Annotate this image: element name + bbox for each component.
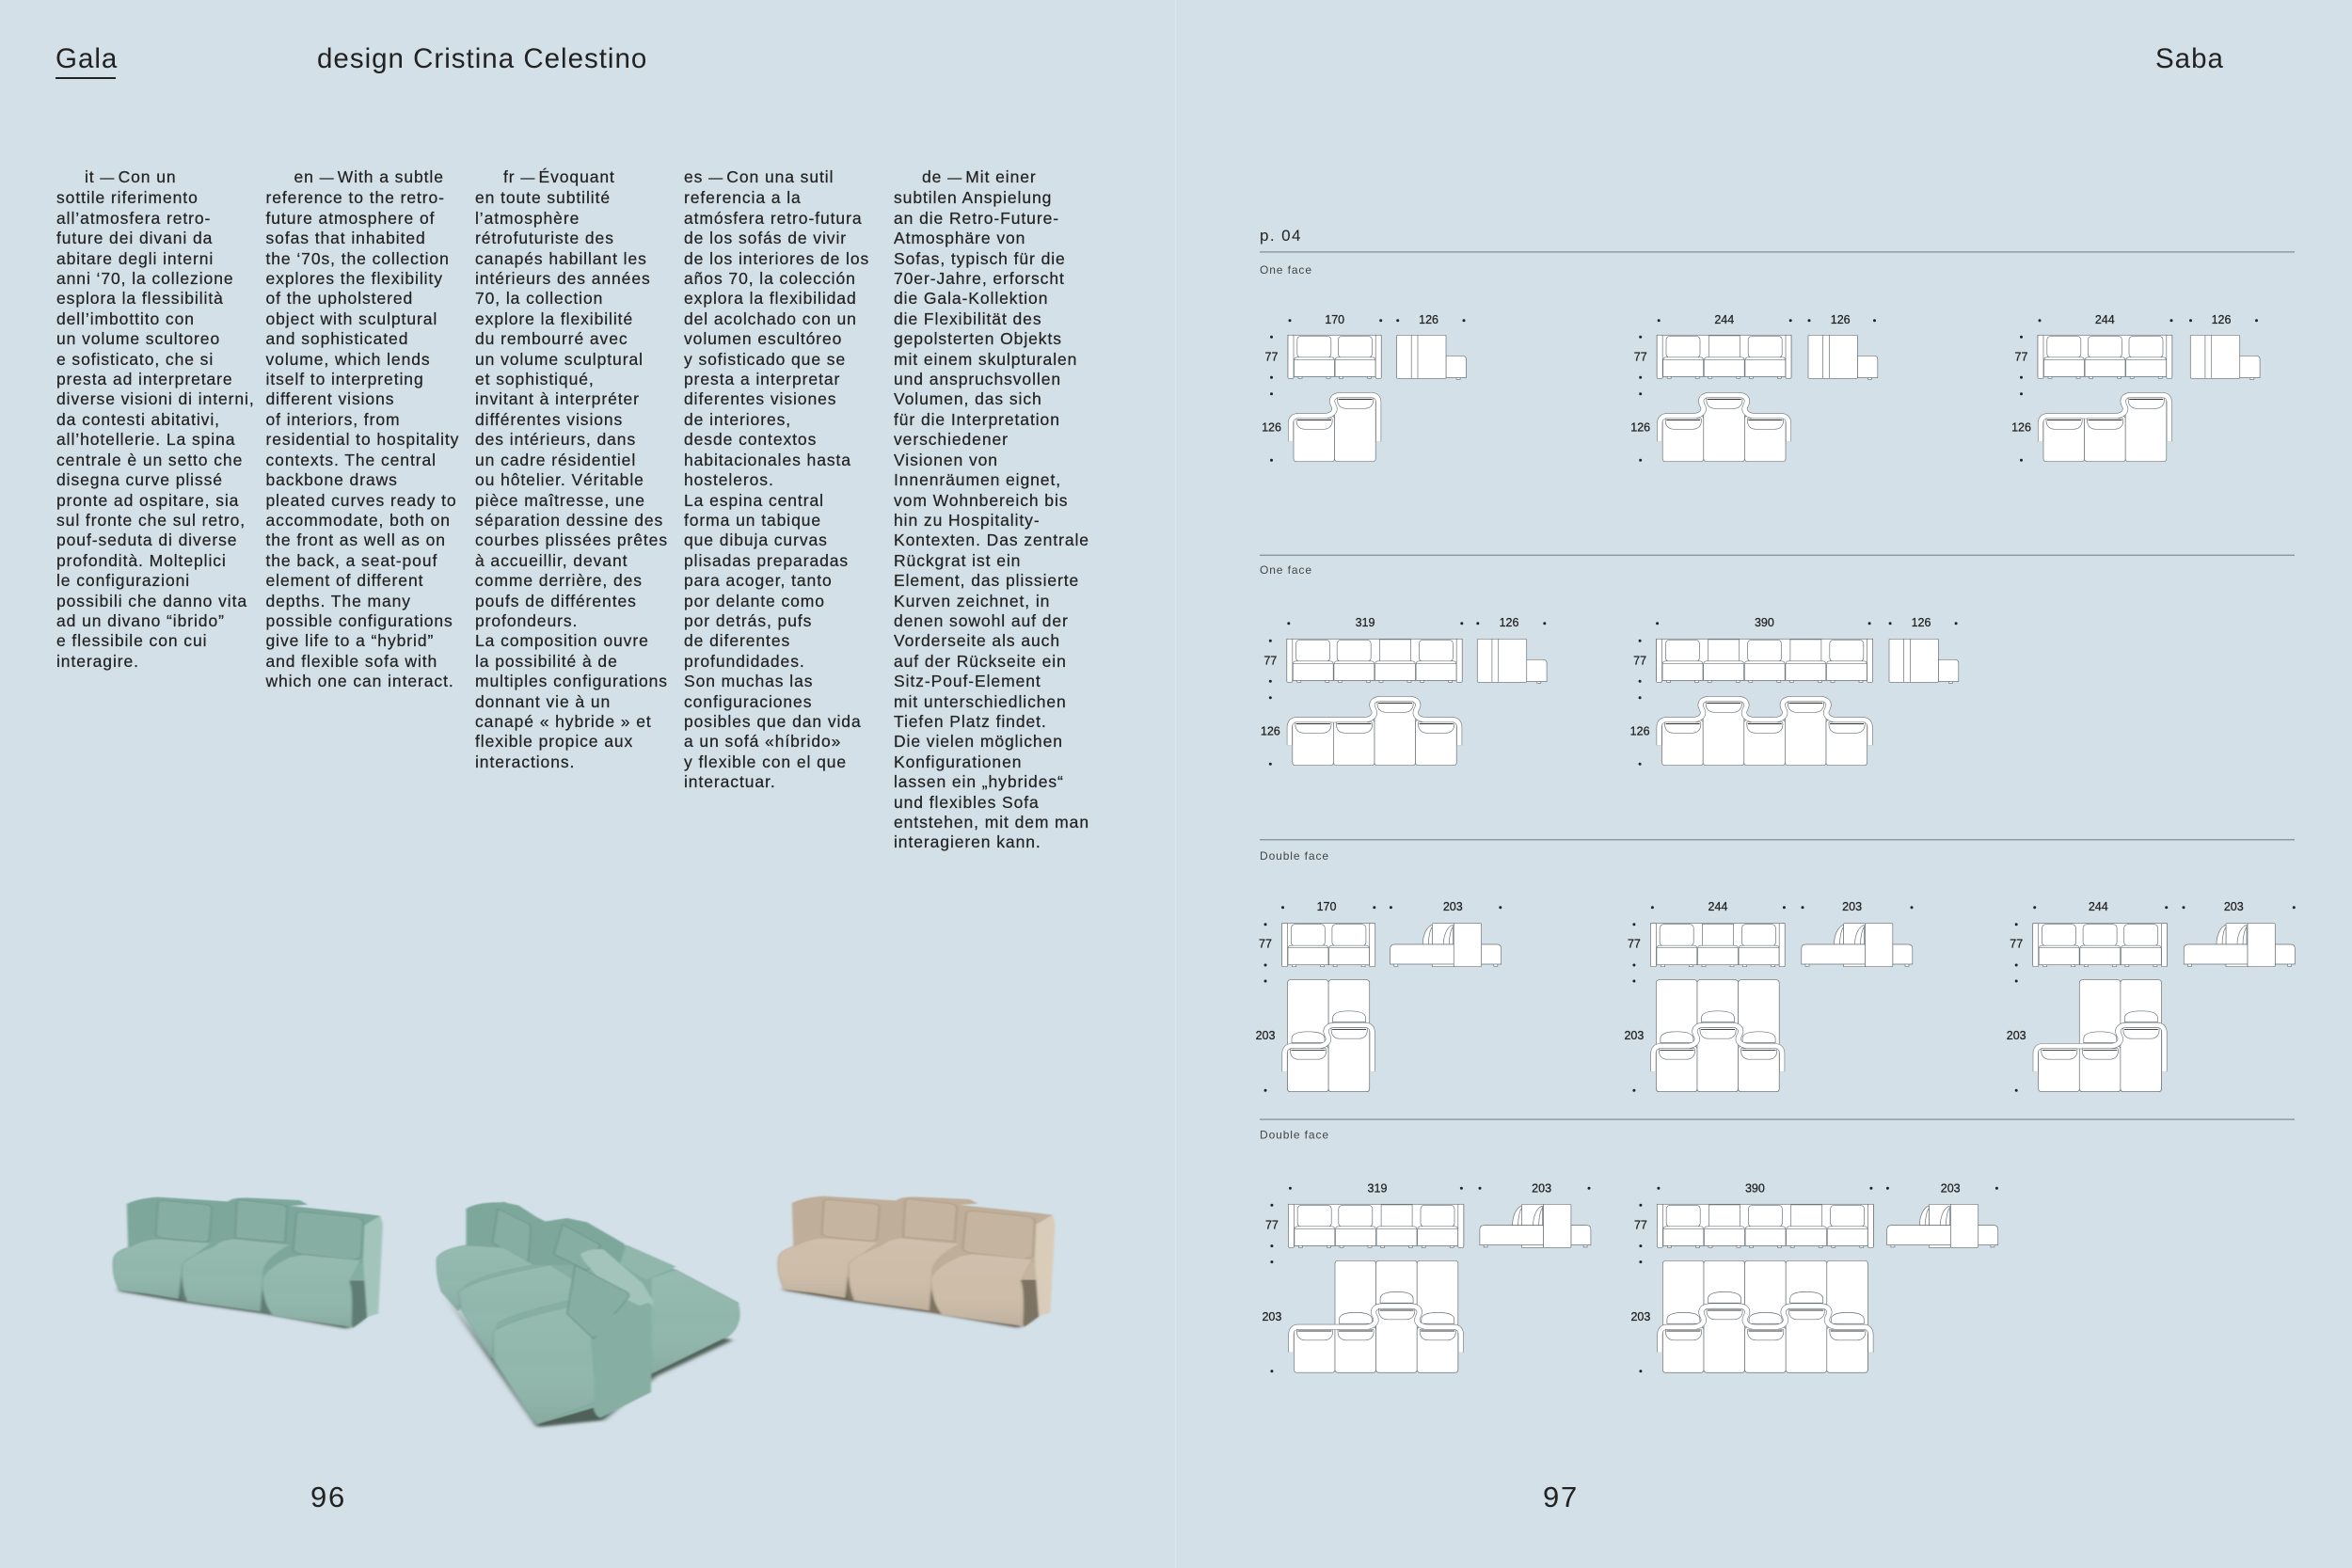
drawing: one face 170 x 126: 126 — [1262, 420, 1281, 434]
text column: English: and flexible sofa with — [265, 652, 437, 671]
drawing: one face 244 x 126 (centre high): 77 — [1634, 350, 1647, 363]
text column: French: donnant vie à un — [475, 692, 611, 711]
text column: French: un volume sculptural — [475, 350, 644, 369]
text column: Spanish: posibles que dan vida — [684, 712, 862, 731]
text column: French: rétrofuturiste des — [475, 229, 614, 247]
drawing: double face 244 x 203 (centre high): 203 — [1842, 900, 1862, 913]
text column: Italian: disegna curve plissé — [56, 470, 223, 489]
text column: Spanish: que dibuja curvas — [684, 531, 828, 549]
text column: Spanish: atmósfera retro-futura — [684, 209, 862, 228]
text column: English: possible configurations — [265, 611, 453, 630]
text column: French: intérieurs des années — [475, 269, 651, 288]
text column: Spanish: diferentes visiones — [684, 389, 836, 408]
text column: French: 70, la collection — [475, 289, 603, 308]
text column: English: accommodate, both on — [265, 511, 451, 530]
text column: French: invitant à interpréter — [475, 389, 640, 408]
sofa photo: teal double-face composition — [437, 1202, 739, 1427]
text column: Italian: future dei divani da — [56, 229, 213, 247]
text column: Spanish: y sofisticado que se — [684, 350, 846, 369]
drawing: one face 244 x 126 (end high): 244 — [2095, 313, 2115, 326]
text column: German: Element, das plissierte — [894, 571, 1079, 590]
text column: French: canapés habillant les — [475, 249, 647, 268]
drawing: double face 170 x 203: 203 — [1443, 900, 1463, 913]
rule: section 3 — [1260, 839, 2295, 840]
drawing: one face 319 x 126: 126 — [1261, 724, 1280, 737]
text column: German — [894, 167, 1089, 851]
text column: Italian: pronte ad ospitare, sia — [56, 491, 239, 510]
text column: Italian: it — Con un — [85, 167, 177, 186]
drawing: double face 319 x 203: 77 — [1265, 1218, 1279, 1231]
text column: English: explores the flexibility — [265, 269, 443, 288]
text column: Spanish: plisadas preparadas — [684, 551, 849, 570]
drawing: one face 244 x 126 (centre high) — [1630, 313, 1878, 462]
text column: Italian: e flessibile con cui — [56, 631, 207, 650]
text column: Italian — [56, 167, 255, 671]
text column: English: residential to hospitality — [265, 430, 459, 449]
drawing: double face 390 x 203 — [1630, 1181, 1998, 1372]
text column: English: en — With a subtle — [294, 167, 444, 186]
text column: Spanish: referencia a la — [684, 188, 802, 207]
text column: Italian: esplora la flessibilità — [56, 289, 224, 308]
text column: French: un cadre résidentiel — [475, 451, 636, 469]
text column: English: backbone draws — [265, 470, 398, 489]
text column: French — [475, 167, 668, 771]
text column: German: Die vielen möglichen — [894, 732, 1063, 751]
text column: German: lassen ein „hybrides“ — [894, 772, 1064, 791]
drawing: double face 390 x 203: 77 — [1634, 1218, 1647, 1231]
text column: Spanish: de los interiores de los — [684, 249, 869, 268]
drawing: double face 319 x 203: 319 — [1368, 1181, 1387, 1195]
text column: French: l’atmosphère — [475, 209, 580, 228]
text column: Spanish: La espina central — [684, 491, 824, 510]
text column: French: fr — Évoquant — [503, 167, 615, 186]
text column: Spanish: para acoger, tanto — [684, 571, 833, 590]
text column: English: the ‘70s, the collection — [265, 249, 450, 268]
text column: English: object with sculptural — [265, 309, 437, 328]
text column: French: flexible propice aux — [475, 732, 633, 751]
text column: German: Tiefen Platz findet. — [894, 712, 1047, 731]
text column: Italian: ad un divano “ibrido” — [56, 611, 225, 630]
rule: section 4 — [1260, 1118, 2295, 1120]
text column: French: comme derrière, des — [475, 571, 643, 590]
drawing: double face 390 x 203: 203 — [1630, 1310, 1650, 1323]
text column: French: interactions. — [475, 752, 575, 771]
text column: Spanish: a un sofá «híbrido» — [684, 732, 841, 751]
label: Double face: Double face — [1260, 849, 1329, 863]
text column: German: an die Retro-Future- — [894, 209, 1059, 228]
text column: Italian: abitare degli interni — [56, 249, 214, 268]
text column: German: mit unterschiedlichen — [894, 692, 1067, 711]
label: Double face: Double face — [1260, 1129, 1329, 1142]
sofa photo: beige three-seater — [778, 1196, 1055, 1328]
text column: French: multiples configurations — [475, 672, 668, 690]
text column: English: element of different — [265, 571, 423, 590]
drawing: double face 170 x 203 — [1256, 900, 1502, 1092]
sofa photo: teal three-seater — [113, 1197, 383, 1329]
label: One face: One face — [1260, 263, 1312, 277]
text column: English: of the upholstered — [265, 289, 413, 308]
text column: Spanish: habitacionales hasta — [684, 451, 851, 469]
text column: Spanish: Son muchas las — [684, 672, 813, 690]
text column: Italian: sottile riferimento — [56, 188, 199, 207]
text column: French: pièce maîtresse, une — [475, 491, 645, 510]
text column: Spanish: forma un tabique — [684, 511, 821, 530]
text column: Spanish — [683, 167, 869, 791]
drawing: double face 244 x 203 (end high) — [2007, 900, 2296, 1092]
text column: Spanish: es — Con una sutil — [684, 167, 834, 186]
text column: Italian: dell’imbottito con — [56, 309, 195, 328]
text column: Spanish: de los sofás de vivir — [684, 229, 847, 247]
drawing: one face 170 x 126: 170 — [1325, 313, 1344, 326]
text column: Spanish: por delante como — [684, 592, 825, 610]
text column: Italian: pouf-seduta di diverse — [56, 531, 237, 549]
drawing: double face 319 x 203: 203 — [1532, 1181, 1551, 1195]
drawing: double face 390 x 203: 390 — [1745, 1181, 1765, 1195]
text column: English — [265, 167, 459, 690]
text column: Italian: le configurazioni — [56, 571, 190, 590]
text column: German: Sofas, typisch für die — [894, 249, 1066, 268]
text column: German: subtilen Anspielung — [894, 188, 1052, 207]
text column: Italian: centrale è un setto che — [56, 451, 243, 469]
text column: German: und flexibles Sofa — [894, 793, 1040, 812]
text column: English: the back, a seat-pouf — [265, 551, 437, 570]
label: One face: One face — [1260, 563, 1312, 577]
drawing: one face 170 x 126 — [1262, 313, 1466, 462]
drawing: one face 244 x 126 (end high): 77 — [2015, 350, 2027, 363]
text column: English: future atmosphere of — [265, 209, 435, 228]
text column: French: courbes plissées prêtes — [475, 531, 668, 549]
text column: French: du rembourré avec — [475, 329, 628, 348]
drawing: one face 319 x 126: 77 — [1263, 654, 1277, 667]
text column: Italian: interagire. — [56, 652, 139, 671]
drawing: double face 390 x 203: 203 — [1941, 1181, 1961, 1195]
text column: Spanish: profundidades. — [684, 652, 805, 671]
drawing: double face 244 x 203 (end high): 203 — [2007, 1029, 2026, 1042]
page number 97: 97 — [1543, 1481, 1579, 1513]
text column: German: de — Mit einer — [922, 167, 1037, 186]
text column: English: contexts. The central — [265, 451, 437, 469]
drawing: one face 390 x 126: 390 — [1755, 616, 1774, 629]
text column: German: auf der Rückseite ein — [894, 652, 1067, 671]
text column: Spanish: del acolchado con un — [684, 309, 857, 328]
text column: German: hin zu Hospitality- — [894, 511, 1041, 530]
text column: Italian: presta ad interpretare — [56, 370, 233, 388]
text column: German: gepolsterten Objekts — [894, 329, 1062, 348]
drawing: double face 170 x 203: 77 — [1259, 937, 1272, 950]
text column: Spanish: hosteleros. — [684, 470, 774, 489]
drawing: double face 170 x 203: 170 — [1317, 900, 1336, 913]
text column: German: Kontexten. Das zentrale — [894, 531, 1089, 549]
text column: English: of interiors, from — [265, 410, 400, 429]
text column: French: différentes visions — [475, 410, 623, 429]
text column: English: different visions — [265, 389, 394, 408]
text column: French: des intérieurs, dans — [475, 430, 636, 449]
drawing: one face 390 x 126: 77 — [1633, 654, 1646, 667]
text column: Italian: all’atmosfera retro- — [56, 209, 211, 228]
page divider — [1175, 0, 1176, 1568]
text column: French: profondeurs. — [475, 611, 578, 630]
text column: Italian: diverse visioni di interni, — [56, 389, 255, 408]
text column: Italian: un volume scultoreo — [56, 329, 220, 348]
text column: German: für die Interpretation — [894, 410, 1060, 429]
text column: English: give life to a “hybrid” — [265, 631, 434, 650]
drawing: one face 170 x 126: 77 — [1265, 350, 1278, 363]
text column: Italian: profondità. Molteplici — [56, 551, 227, 570]
text column: German: entstehen, mit dem man — [894, 813, 1089, 832]
drawing: one face 319 x 126: 126 — [1500, 616, 1518, 629]
section heading: p. 04: p. 04 — [1260, 227, 1302, 245]
text column: French: ou hôtelier. Véritable — [475, 470, 644, 489]
page number 96: 96 — [310, 1481, 346, 1513]
text column: German: mit einem skulpturalen — [894, 350, 1077, 369]
text column: Spanish: de interiores, — [684, 410, 791, 429]
rule: section 2 — [1260, 555, 2295, 556]
drawing: double face 244 x 203 (end high): 244 — [2089, 900, 2108, 913]
drawing: one face 244 x 126 (centre high): 244 — [1714, 313, 1734, 326]
drawing: one face 244 x 126 (end high): 126 — [2212, 313, 2231, 326]
heading: designer: design Cristina Celestino — [317, 43, 647, 74]
text column: Spanish: explora la flexibilidad — [684, 289, 857, 308]
text column: English: sofas that inhabited — [265, 229, 426, 247]
text column: German: Konfigurationen — [894, 752, 1022, 771]
text column: English: the front as well as on — [265, 531, 446, 549]
text column: Italian: anni ‘70, la collezione — [56, 269, 233, 288]
text column: French: séparation dessine des — [475, 511, 663, 530]
text column: Italian: e sofisticato, che si — [56, 350, 214, 369]
drawing: one face 390 x 126: 126 — [1630, 724, 1650, 737]
text column: German: verschiedener — [894, 430, 1009, 449]
text column: Spanish: presta a interpretar — [684, 370, 840, 388]
text column: German: Vorderseite als auch — [894, 631, 1060, 650]
drawing: double face 244 x 203 (centre high): 244 — [1708, 900, 1727, 913]
text column: English: itself to interpreting — [265, 370, 424, 388]
text column: Spanish: interactuar. — [684, 772, 776, 791]
text column: Spanish: de diferentes — [684, 631, 790, 650]
drawing: double face 244 x 203 (centre high): 77 — [1628, 937, 1641, 950]
text column: German: Sitz-Pouf-Element — [894, 672, 1041, 690]
text column: French: et sophistiqué, — [475, 370, 595, 388]
drawing: double face 244 x 203 (centre high): 203 — [1624, 1029, 1644, 1042]
text column: German: vom Wohnbereich bis — [894, 491, 1068, 510]
text column: French: explore la flexibilité — [475, 309, 633, 328]
text column: Italian: da contesti abitativi, — [56, 410, 220, 429]
drawing: one face 319 x 126 — [1261, 616, 1547, 766]
drawing: double face 170 x 203: 203 — [1256, 1029, 1275, 1042]
drawing: one face 244 x 126 (end high): 126 — [2011, 420, 2031, 434]
text column: German: die Gala-Kollektion — [894, 289, 1048, 308]
text column: French: canapé « hybride » et — [475, 712, 652, 731]
drawing: one face 244 x 126 (centre high): 126 — [1831, 313, 1851, 326]
text column: Spanish: volumen escultóreo — [684, 329, 842, 348]
text column: German: denen sowohl auf der — [894, 611, 1069, 630]
drawing: double face 244 x 203 (centre high) — [1624, 900, 1914, 1092]
text column: German: Rückgrat ist ein — [894, 551, 1021, 570]
text column: Spanish: y flexible con el que — [684, 752, 847, 771]
text column: French: en toute subtilité — [475, 188, 611, 207]
text column: Italian: possibili che danno vita — [56, 592, 247, 610]
heading: Gala: Gala — [56, 43, 118, 74]
text column: Spanish: desde contextos — [684, 430, 817, 449]
text column: English: depths. The many — [265, 592, 411, 610]
text column: French: à accueillir, devant — [475, 551, 628, 570]
drawing: double face 319 x 203 — [1262, 1181, 1591, 1372]
drawing: one face 244 x 126 (end high) — [2011, 313, 2260, 462]
text column: Italian: sul fronte che sul retro, — [56, 511, 246, 530]
heading: Saba: Saba — [2155, 43, 2224, 74]
text column: English: reference to the retro- — [265, 188, 445, 207]
text column: German: Visionen von — [894, 451, 998, 469]
text column: English: and sophisticated — [265, 329, 408, 348]
text column: French: poufs de différentes — [475, 592, 637, 610]
drawing: double face 244 x 203 (end high): 77 — [2010, 937, 2023, 950]
text column: French: la possibilité à de — [475, 652, 618, 671]
drawing: one face 170 x 126: 126 — [1419, 313, 1438, 326]
drawing: one face 390 x 126 — [1630, 616, 1959, 766]
text column: German: 70er-Jahre, erforscht — [894, 269, 1065, 288]
drawing: double face 244 x 203 (end high): 203 — [2224, 900, 2244, 913]
text column: German: Atmosphäre von — [894, 229, 1025, 247]
text column: German: interagieren kann. — [894, 832, 1041, 851]
drawing: one face 244 x 126 (centre high): 126 — [1630, 420, 1650, 434]
text column: German: und anspruchsvollen — [894, 370, 1061, 388]
text column: English: pleated curves ready to — [265, 491, 457, 510]
text column: Spanish: años 70, la colección — [684, 269, 856, 288]
text column: French: La composition ouvre — [475, 631, 649, 650]
text column: Spanish: configuraciones — [684, 692, 812, 711]
rule: section 1 — [1260, 251, 2295, 253]
drawing: one face 319 x 126: 319 — [1356, 616, 1375, 629]
drawing: one face 390 x 126: 126 — [1912, 616, 1931, 629]
text column: German: Innenräumen eignet, — [894, 470, 1061, 489]
text column: Spanish: por detrás, pufs — [684, 611, 812, 630]
text column: Italian: all’hotellerie. La spina — [56, 430, 235, 449]
text column: English: volume, which lends — [265, 350, 431, 369]
text column: German: Kurven zeichnet, in — [894, 592, 1050, 610]
text column: German: Volumen, das sich — [894, 389, 1042, 408]
drawing: double face 319 x 203: 203 — [1262, 1310, 1281, 1323]
text column: English: which one can interact. — [265, 672, 454, 690]
text column: German: die Flexibilität des — [894, 309, 1042, 328]
